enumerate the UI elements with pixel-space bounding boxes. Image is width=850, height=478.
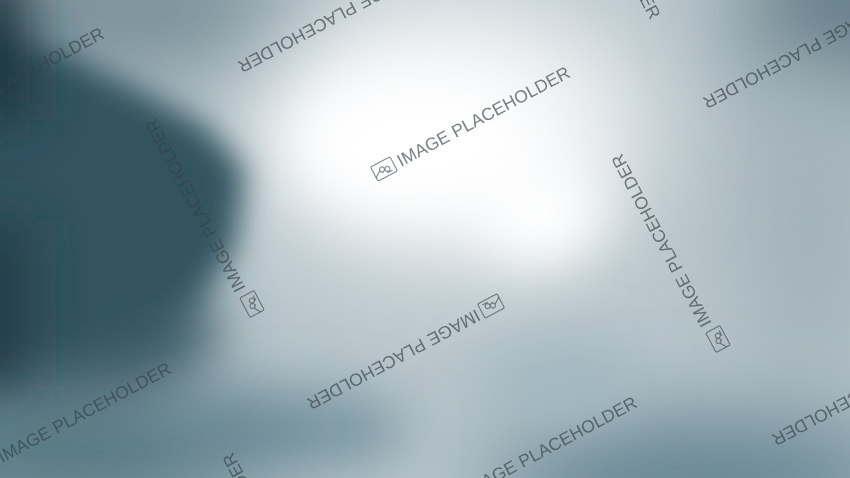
watermark: left vertical: IMAGE PLACEHOLDER (141, 116, 250, 296)
watermark: right vertical: IMAGE PLACEHOLDER (607, 151, 716, 331)
watermark: lower centre: IMAGE PLACEHOLDER (304, 305, 484, 414)
watermark: centre: IMAGE PLACEHOLDER (393, 62, 573, 171)
